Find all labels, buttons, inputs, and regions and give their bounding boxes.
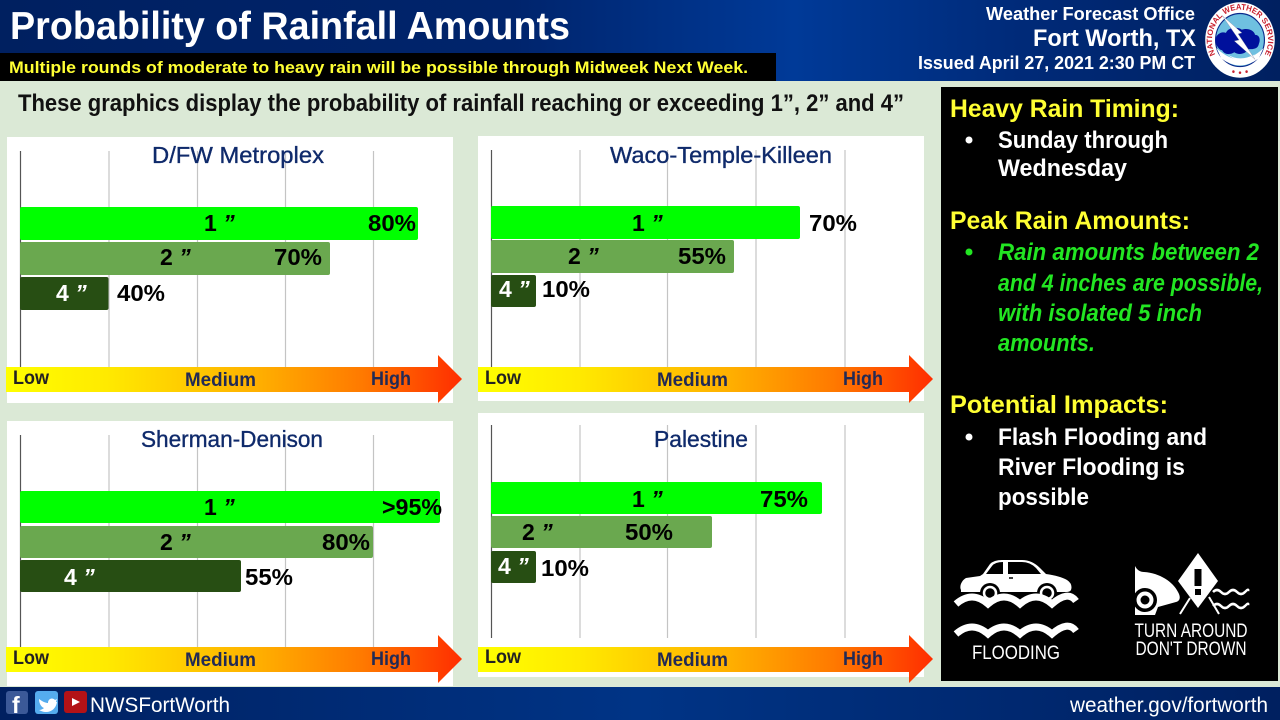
icon: flooding car [956, 560, 1076, 664]
bar 1 inch 80%: 1 ” [204, 210, 235, 236]
office info: Weather Forecast Office [986, 4, 1195, 24]
bar 2 inch 50%: 50% [625, 519, 673, 545]
icon: turn around don't drown: DON'T DROWN [1136, 639, 1246, 660]
bar 1 inch 75% [491, 482, 822, 514]
bar 1 inch 75%: 75% [760, 486, 808, 512]
turn around label: TURN AROUND [1134, 621, 1248, 642]
potential impacts: Flash Flooding and [998, 424, 1207, 451]
bar 4 inch 10%: 10% [541, 555, 589, 581]
bar 1 inch 80% [20, 207, 418, 240]
header banner [0, 0, 1280, 81]
intro heading: These graphics display the probability of rainfall reaching or exceeding 1”, 2” and 4” [18, 90, 904, 117]
bar 1 inch 70% [491, 206, 857, 239]
bar 1 inch 70%: 70% [809, 210, 857, 236]
bar 4 inch 55% [20, 560, 293, 592]
arrow scale: Medium [657, 370, 728, 391]
arrow scale: High [843, 649, 883, 670]
arrow scale: Low [13, 368, 49, 389]
icon: youtube [64, 691, 87, 713]
bar 1 inch 70%: 1 ” [632, 210, 663, 236]
chart title: Waco-Temple-Killeen [610, 142, 832, 168]
footer banner [0, 687, 1280, 720]
chart title: D/FW Metroplex [152, 142, 325, 168]
bar 2 inch 55%: 2 ” [568, 243, 599, 269]
bar 4 inch 10%: 4 ” [498, 553, 529, 579]
peak rain amounts: with isolated 5 inch [998, 300, 1202, 327]
heavy rain timing: Sunday through [998, 127, 1168, 154]
panel: Sherman-Denison [6, 421, 462, 686]
panel: D/FW Metroplex [6, 137, 462, 403]
subtitle bar [0, 53, 776, 81]
bar 1 inch 80%: 80% [368, 210, 416, 236]
chart title: Palestine [654, 426, 748, 452]
website: weather.gov/fortworth [1069, 694, 1268, 717]
handle: NWSFortWorth [90, 694, 230, 717]
bar 2 inch 55%: 55% [678, 243, 726, 269]
arrow scale: High [371, 649, 411, 670]
bar 4 inch 40%: 40% [117, 280, 165, 306]
bar 4 inch 40% [20, 277, 165, 310]
icon: turn around don't drown [1133, 553, 1248, 660]
potential impacts: possible [998, 484, 1089, 511]
office info: Fort Worth, TX [1033, 25, 1196, 52]
bar 1 inch >95%: 1 ” [204, 494, 235, 520]
arrow scale [6, 635, 462, 683]
bar 4 inch 10% [491, 275, 590, 307]
bar 2 inch 70% [20, 242, 330, 275]
arrow scale: High [371, 369, 411, 390]
bar 2 inch 50%: 2 ” [522, 519, 553, 545]
office info [918, 4, 1196, 73]
bar 2 inch 80% [20, 526, 373, 558]
arrow scale: Low [485, 368, 521, 389]
bar 2 inch 80%: 80% [322, 529, 370, 555]
bar 2 inch 55% [491, 240, 734, 273]
peak rain amounts: Peak Rain Amounts: [950, 207, 1190, 235]
bar 4 inch 55%: 55% [245, 564, 293, 590]
arrow scale: Medium [185, 370, 256, 391]
icon: twitter [35, 691, 58, 714]
panel: Waco-Temple-Killeen [478, 136, 933, 403]
bar 1 inch >95%: >95% [382, 494, 442, 520]
heavy rain timing [950, 95, 1179, 182]
bar 2 inch 50% [491, 516, 712, 548]
arrow scale: Medium [657, 650, 728, 671]
bar 4 inch 10%: 4 ” [499, 276, 530, 302]
subtitle bar: Multiple rounds of moderate to heavy rain will be possible through Midweek Next Week. [9, 58, 748, 77]
panel: Palestine [478, 413, 933, 683]
potential impacts: River Flooding is [998, 454, 1185, 481]
office info: Issued April 27, 2021 2:30 PM CT [918, 53, 1195, 73]
arrow scale: Medium [185, 650, 256, 671]
icon: NWS logo: NATIONAL WEATHER SERVICE [1206, 4, 1274, 56]
bar 4 inch 10%: 10% [542, 276, 590, 302]
bar 2 inch 70%: 2 ” [160, 244, 191, 270]
bar 2 inch 80%: 2 ” [160, 529, 191, 555]
peak rain amounts: Rain amounts between 2 [998, 239, 1260, 266]
flooding label: FLOODING [972, 643, 1060, 664]
bar 4 inch 40%: 4 ” [56, 280, 87, 306]
arrow scale: Low [485, 647, 521, 668]
potential impacts [950, 391, 1207, 511]
bar 1 inch 75%: 1 ” [632, 486, 663, 512]
bar 2 inch 70%: 70% [274, 244, 322, 270]
bar 4 inch 55%: 4 ” [64, 564, 95, 590]
bar 1 inch >95% [20, 491, 442, 523]
peak rain amounts [950, 207, 1263, 357]
panel: summary [941, 87, 1278, 681]
arrow scale [6, 355, 462, 403]
arrow scale: High [843, 369, 883, 390]
gridlines [109, 151, 374, 367]
heavy rain timing: Wednesday [998, 155, 1128, 182]
arrow scale [478, 355, 933, 403]
chart title: Sherman-Denison [141, 426, 323, 452]
potential impacts: Potential Impacts: [950, 391, 1168, 419]
arrow scale: Low [13, 648, 49, 669]
icon: facebook [6, 691, 28, 718]
peak rain amounts: amounts. [998, 330, 1095, 357]
arrow scale [478, 635, 933, 683]
car body [960, 560, 1072, 592]
icon: facebook: f [12, 692, 20, 718]
title: Probability of Rainfall Amounts [10, 5, 570, 48]
heavy rain timing: Heavy Rain Timing: [950, 95, 1179, 123]
bar 4 inch 10% [491, 551, 589, 583]
